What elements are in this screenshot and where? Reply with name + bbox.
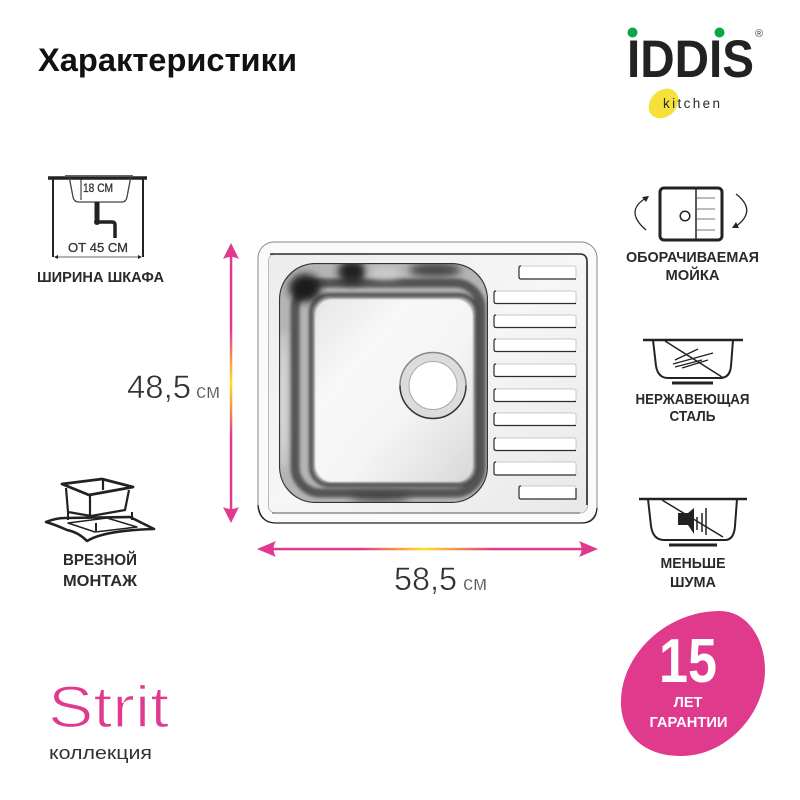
badge number: 15	[659, 627, 717, 696]
label: шума: ШУМА	[670, 574, 716, 591]
collection caption: коллекция	[49, 743, 152, 763]
collection name: Strit	[48, 675, 169, 740]
drainer ribs	[494, 266, 576, 499]
product photo: stainless sink	[258, 242, 597, 523]
label: монтаж: МОНТАЖ	[63, 573, 138, 590]
icon: flush mount	[46, 479, 154, 541]
warranty badge	[621, 611, 765, 756]
logo wordmark: IDDIS	[627, 30, 754, 89]
label: 18 см: 18 СМ	[83, 181, 113, 195]
dimension: height: 48,5	[127, 369, 191, 405]
logo: IDDIS kitchen: ®	[755, 28, 763, 40]
label: от 45 см: ОТ 45 СМ	[68, 240, 128, 255]
title: Характеристики	[38, 42, 297, 78]
width arrow	[257, 541, 598, 557]
badge blob	[621, 611, 765, 756]
badge text: гарантии: ГАРАНТИИ	[650, 715, 728, 731]
label: оборачиваемая: ОБОРАЧИВАЕМАЯ	[626, 249, 759, 266]
logo: IDDIS kitchen: kitchen	[663, 96, 720, 111]
sink bowl	[279, 260, 488, 503]
icon: stainless steel	[643, 340, 743, 383]
icon: less noise	[639, 499, 747, 545]
sink rim	[258, 242, 597, 523]
label: нержавеющая: НЕРЖАВЕЮЩАЯ	[636, 391, 750, 408]
badge text: лет: ЛЕТ	[674, 695, 702, 711]
logo: IDDIS kitchen	[627, 28, 763, 124]
label: меньше: МЕНЬШЕ	[660, 555, 726, 572]
label: врезной: ВРЕЗНОЙ	[63, 550, 137, 569]
label: ширина шкафа: ШИРИНА ШКАФА	[37, 269, 164, 286]
icon: cabinet width	[48, 176, 147, 259]
drain	[400, 352, 466, 419]
label: сталь: СТАЛЬ	[670, 408, 716, 425]
icon: reversible sink	[635, 188, 747, 240]
height arrow	[223, 243, 239, 523]
bowl floor	[315, 299, 473, 482]
dimension: width: 58,5	[394, 561, 457, 597]
unit: height: см	[196, 381, 220, 403]
sink deck	[268, 254, 588, 513]
unit: width: см	[463, 573, 487, 595]
label: мойка: МОЙКА	[666, 266, 720, 284]
